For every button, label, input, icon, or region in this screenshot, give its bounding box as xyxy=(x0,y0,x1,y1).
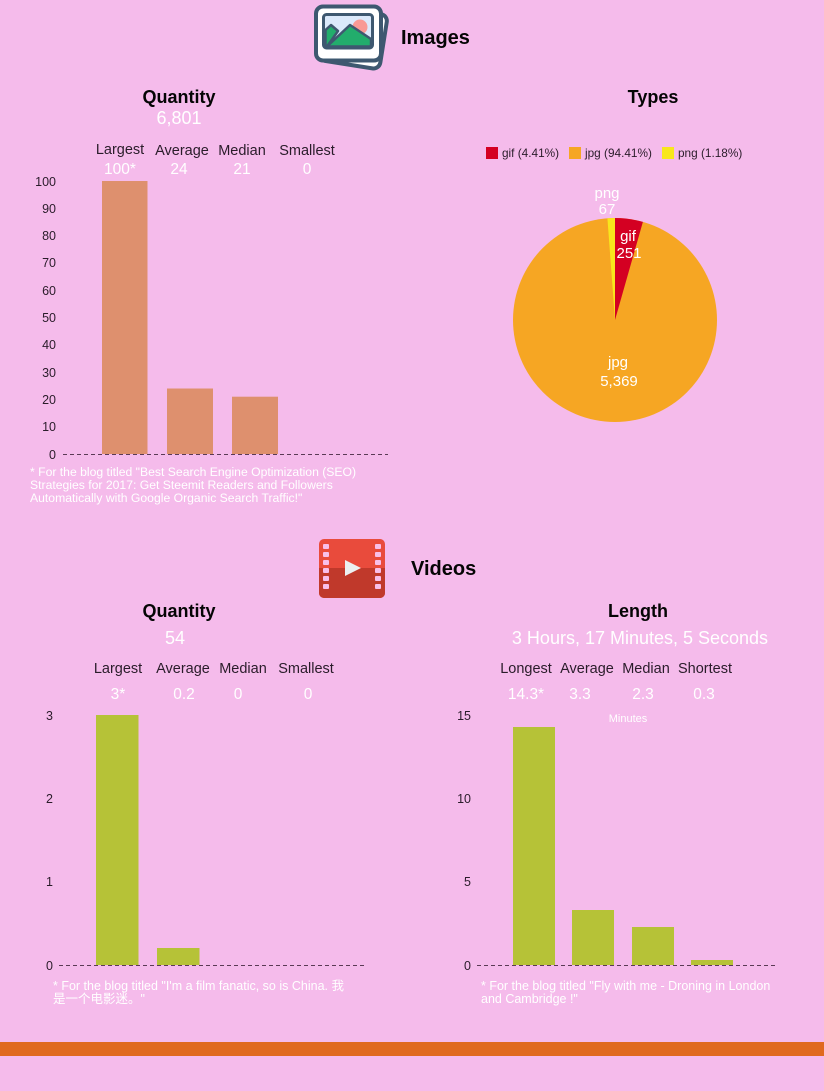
heading: Images: Images xyxy=(401,27,470,49)
panel: video length xyxy=(457,601,776,1006)
y axis ticks xyxy=(46,709,53,973)
pie labels: 67 xyxy=(599,201,615,218)
stat labels xyxy=(94,661,334,677)
stat labels xyxy=(96,142,335,159)
footnote: * For the blog titled "I'm a film fanatic, so is China. 我 xyxy=(53,979,344,993)
y axis ticks: 40 xyxy=(42,338,56,352)
legend: jpg (94.41%) xyxy=(584,146,652,160)
y axis ticks: 20 xyxy=(42,393,56,407)
stat values: 14.3* xyxy=(508,686,544,703)
stat values: 0.3 xyxy=(693,686,715,703)
stat values xyxy=(104,161,312,178)
panel: image types xyxy=(486,87,742,422)
total image quantity: 6,801 xyxy=(156,108,202,128)
footer bar xyxy=(0,1042,824,1056)
bar chart xyxy=(102,181,278,454)
y axis ticks: 0 xyxy=(46,959,53,973)
y axis ticks: 10 xyxy=(42,420,56,434)
stat values: 24 xyxy=(170,161,188,178)
y axis ticks: 5 xyxy=(464,875,471,889)
stat labels: Shortest xyxy=(678,661,732,677)
stat values xyxy=(508,686,715,703)
stat labels: Longest xyxy=(500,661,552,677)
stat labels: Average xyxy=(560,661,614,677)
legend: png (1.18%) xyxy=(678,146,742,160)
total video quantity: 54 xyxy=(165,628,185,648)
y axis ticks: 10 xyxy=(457,792,471,806)
bar chart xyxy=(513,727,733,965)
stat values: 0.2 xyxy=(173,686,195,703)
stat labels: Average xyxy=(155,143,209,159)
stat values: 0 xyxy=(304,686,313,703)
stat values: 100* xyxy=(104,161,136,178)
stat labels: Smallest xyxy=(279,143,335,159)
stat labels: Average xyxy=(156,661,210,677)
panel: video quantity xyxy=(46,601,364,1006)
y axis ticks: 70 xyxy=(42,256,56,270)
stat values: 3* xyxy=(111,686,125,703)
stat values: 2.3 xyxy=(632,686,654,703)
y axis ticks: 80 xyxy=(42,229,56,243)
y axis ticks xyxy=(35,175,56,462)
unit label: Minutes xyxy=(609,713,648,725)
y axis ticks: 3 xyxy=(46,709,53,723)
legend: gif (4.41%) xyxy=(502,146,559,160)
heading: image quantity: Quantity xyxy=(142,87,216,107)
y axis ticks: 50 xyxy=(42,311,56,325)
heading: video length: Length xyxy=(608,601,668,621)
y axis ticks: 0 xyxy=(464,959,471,973)
stat labels xyxy=(500,661,732,677)
stat labels: Median xyxy=(219,661,267,677)
footnote: * For the blog titled "Best Search Engine Optimization (SEO) xyxy=(30,465,356,479)
footnote: * For the blog titled "Fly with me - Droning in London xyxy=(481,979,770,993)
footnote: and Cambridge !" xyxy=(481,992,578,1006)
y axis ticks: 15 xyxy=(457,709,471,723)
y axis ticks: 2 xyxy=(46,792,53,806)
stat values: 21 xyxy=(233,161,251,178)
pie labels: gif xyxy=(620,228,637,245)
y axis ticks: 0 xyxy=(49,448,56,462)
y axis ticks xyxy=(457,709,471,973)
pie labels: jpg xyxy=(607,354,628,371)
legend xyxy=(486,146,742,160)
pie chart xyxy=(513,218,717,422)
y axis ticks: 30 xyxy=(42,366,56,380)
icon: images xyxy=(316,5,388,70)
stat labels: Median xyxy=(218,143,266,159)
y axis ticks: 100 xyxy=(35,175,56,189)
stat labels: Smallest xyxy=(278,661,334,677)
stat values xyxy=(111,686,313,703)
stat values: 0 xyxy=(303,161,312,178)
panel: image quantity xyxy=(30,87,388,505)
y axis ticks: 1 xyxy=(46,875,53,889)
stat values: 3.3 xyxy=(569,686,591,703)
footnote: 是一个电影迷。" xyxy=(53,992,145,1006)
footnote: Automatically with Google Organic Search Traffic!" xyxy=(30,491,302,505)
pie labels: 251 xyxy=(616,245,642,262)
footnote: Strategies for 2017: Get Steemit Readers and Followers xyxy=(30,478,333,492)
y axis ticks: 60 xyxy=(42,284,56,298)
stat values: 0 xyxy=(234,686,243,703)
bar chart xyxy=(96,715,200,965)
icon: video xyxy=(319,539,385,598)
stat labels: Median xyxy=(622,661,670,677)
total video length: 3 Hours, 17 Minutes, 5 Seconds xyxy=(512,628,768,648)
heading: video quantity: Quantity xyxy=(142,601,216,621)
pie labels: png xyxy=(594,185,620,202)
pie labels xyxy=(594,185,642,390)
stat labels: Largest xyxy=(94,661,142,677)
heading: image types: Types xyxy=(628,87,678,107)
y axis ticks: 90 xyxy=(42,202,56,216)
heading: Videos: Videos xyxy=(411,558,476,580)
pie labels: 5,369 xyxy=(600,373,638,390)
stat labels: Largest xyxy=(96,142,144,158)
